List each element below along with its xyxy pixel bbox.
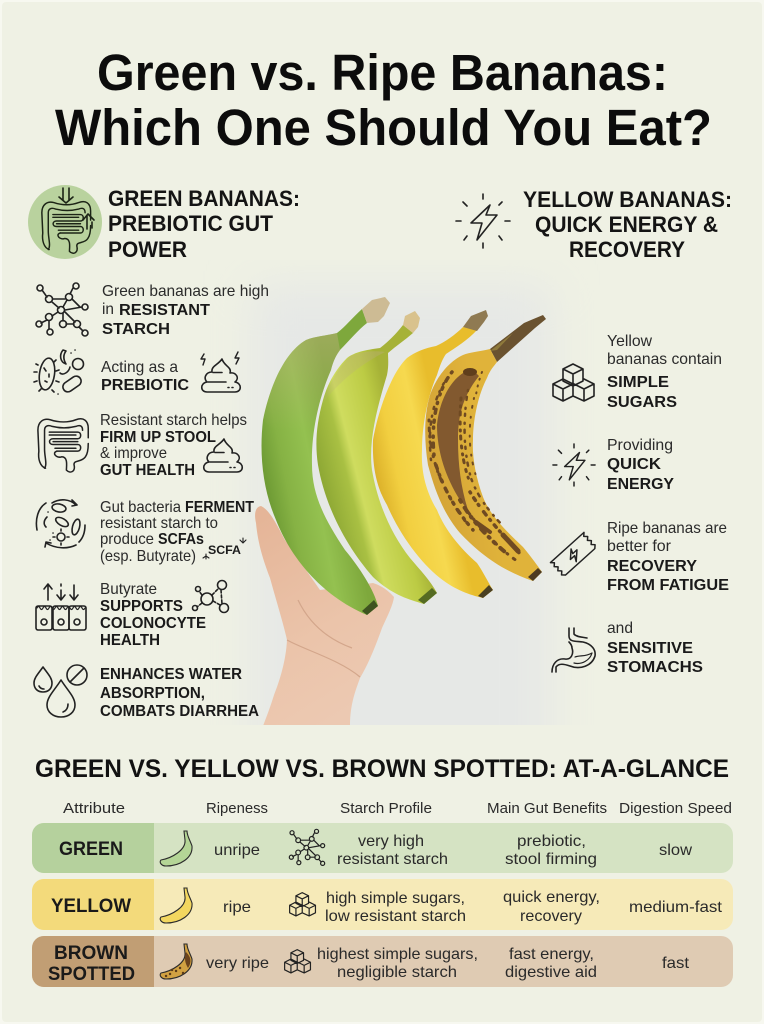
icon: yellow mini banana bbox=[160, 888, 192, 923]
panel: yellow banana benefits bbox=[550, 333, 729, 676]
table row: yellow: ripe bbox=[223, 899, 251, 916]
heading: yellow bananas: RECOVERY bbox=[569, 237, 685, 262]
table header: Main Gut Benefits bbox=[487, 800, 607, 817]
table header: Attribute bbox=[63, 800, 125, 817]
text: quick energy: Providing bbox=[607, 437, 673, 454]
text: quick energy: QUICK bbox=[607, 456, 661, 473]
text: ferment: SCFAs bbox=[158, 531, 204, 548]
icon: starch molecule bbox=[36, 283, 88, 336]
text: sensitive stomachs: SENSITIVE bbox=[607, 640, 693, 657]
text: sensitive stomachs: STOMACHS bbox=[607, 659, 703, 676]
text: resistant starch: in bbox=[102, 301, 114, 318]
text: colonocyte bbox=[100, 581, 206, 649]
icon: water drops bbox=[34, 665, 87, 717]
text: ferment: Gut bacteria bbox=[100, 499, 181, 516]
text: recovery: Ripe bananas are bbox=[607, 520, 727, 537]
icon: bacteria bbox=[34, 350, 84, 394]
panel: green banana benefits bbox=[34, 283, 269, 720]
table row: brown spotted: fast bbox=[662, 955, 690, 972]
icon: gut in green circle bbox=[28, 185, 102, 259]
text: resistant starch: RESISTANT bbox=[119, 302, 210, 319]
photo backdrop bbox=[280, 311, 524, 725]
text: ferment: (esp. Butyrate) bbox=[100, 548, 196, 565]
table row: green: very high bbox=[358, 833, 424, 850]
title: Green vs. Ripe Bananas: bbox=[97, 44, 668, 101]
table row: yellow: recovery bbox=[520, 908, 582, 925]
brown spotted banana bbox=[425, 315, 546, 581]
text: ferment bbox=[100, 499, 254, 565]
text: recovery: RECOVERY bbox=[607, 558, 697, 575]
lime banana bbox=[316, 311, 437, 604]
text: ferment: SCFA bbox=[208, 543, 241, 557]
text: sensitive stomachs: and bbox=[607, 620, 633, 637]
table row: yellow: quick energy, bbox=[503, 889, 600, 906]
icon: green mini banana bbox=[160, 831, 192, 866]
text: prebiotic: Acting as a bbox=[101, 359, 178, 376]
icon: cubes bbox=[285, 950, 310, 973]
icon: brown mini banana bbox=[160, 944, 192, 979]
icon: sugar cubes bbox=[553, 364, 594, 401]
table row: brown spotted: fast energy, bbox=[509, 946, 594, 963]
table row: brown spotted: BROWN bbox=[54, 943, 128, 964]
text: colonocyte: Butyrate bbox=[100, 581, 157, 598]
table header bbox=[63, 800, 732, 817]
table row: yellow: medium-fast bbox=[629, 899, 723, 916]
table row: green bbox=[32, 823, 733, 873]
table header: Starch Profile bbox=[340, 800, 432, 817]
table row: green: GREEN bbox=[59, 839, 123, 860]
text: water absorption: ENHANCES WATER bbox=[100, 666, 242, 683]
text: colonocyte: COLONOCYTE bbox=[100, 615, 206, 632]
title bbox=[55, 44, 712, 156]
text: prebiotic bbox=[101, 359, 189, 394]
heading: green bananas: GREEN BANANAS: bbox=[108, 186, 300, 211]
icon: gut bbox=[38, 419, 88, 472]
section heading: at-a-glance: GREEN VS. YELLOW VS. BROWN SPOTTED: AT-A-GLANCE bbox=[35, 755, 729, 783]
icon: butyrate molecule bbox=[192, 580, 228, 612]
title: Which One Should You Eat? bbox=[55, 99, 712, 156]
heading: green bananas bbox=[108, 186, 300, 262]
yellow banana bbox=[373, 310, 493, 598]
text: simple sugars: SIMPLE bbox=[607, 374, 669, 391]
table row: brown spotted: very ripe bbox=[206, 955, 269, 972]
table row: green: stool firming bbox=[505, 851, 597, 868]
heading: green bananas: POWER bbox=[108, 237, 187, 262]
text: water absorption: ABSORPTION, bbox=[100, 685, 205, 702]
text: firm up stool: FIRM UP STOOL bbox=[100, 429, 216, 446]
table header: Digestion Speed bbox=[619, 800, 732, 817]
icon: stool bbox=[204, 439, 242, 472]
text: resistant starch: STARCH bbox=[102, 321, 170, 338]
table row: green: unripe bbox=[214, 842, 260, 859]
text: water absorption bbox=[100, 666, 259, 720]
text: simple sugars: Yellow bbox=[607, 333, 652, 350]
text: ferment: FERMENT bbox=[185, 499, 254, 516]
hand bbox=[255, 506, 394, 726]
heading: yellow bananas bbox=[523, 187, 732, 262]
text: firm up stool: GUT HEALTH bbox=[100, 462, 195, 479]
icon: quick energy bbox=[553, 444, 595, 486]
text: quick energy bbox=[607, 437, 674, 493]
table header: Ripeness bbox=[206, 800, 268, 817]
table row: yellow: YELLOW bbox=[51, 896, 131, 917]
heading: yellow bananas: QUICK ENERGY & bbox=[535, 212, 718, 237]
text: water absorption: COMBATS DIARRHEA bbox=[100, 703, 259, 720]
text: simple sugars bbox=[607, 333, 722, 411]
text: firm up stool bbox=[100, 412, 247, 479]
table row: green: prebiotic, bbox=[517, 833, 586, 850]
green banana bbox=[262, 297, 390, 615]
icon: lightning heading bbox=[456, 194, 510, 248]
table row: brown spotted: negligible starch bbox=[337, 964, 457, 981]
table row: green: resistant starch bbox=[337, 851, 448, 868]
text: resistant starch bbox=[102, 283, 269, 338]
icon: colon cells bbox=[36, 584, 86, 630]
icon: gut bacteria ring bbox=[36, 500, 85, 548]
heading: yellow bananas: YELLOW BANANAS: bbox=[523, 187, 732, 212]
photo: hand holding four bananas bbox=[255, 297, 546, 726]
text: simple sugars: bananas contain bbox=[607, 351, 722, 368]
text: sensitive stomachs bbox=[607, 620, 703, 676]
text: ferment: produce bbox=[100, 531, 154, 548]
table row: yellow: high simple sugars, bbox=[326, 890, 465, 907]
table row: brown spotted: SPOTTED bbox=[48, 964, 135, 985]
text: firm up stool: Resistant starch helps bbox=[100, 412, 247, 429]
text: recovery: better for bbox=[607, 538, 672, 555]
icon: energy bar bbox=[550, 532, 597, 577]
icon: cubes bbox=[290, 893, 315, 916]
text: resistant starch: Green bananas are high bbox=[102, 283, 269, 300]
text: ferment: resistant starch to bbox=[100, 515, 218, 532]
text: recovery bbox=[607, 520, 729, 594]
table row: brown spotted: digestive aid bbox=[505, 964, 597, 981]
text: recovery: FROM FATIGUE bbox=[607, 577, 729, 594]
text: prebiotic: PREBIOTIC bbox=[101, 377, 189, 394]
text: simple sugars: SUGARS bbox=[607, 394, 677, 411]
text: colonocyte: HEALTH bbox=[100, 632, 160, 649]
text: quick energy: ENERGY bbox=[607, 476, 674, 493]
table row: yellow: low resistant starch bbox=[325, 908, 466, 925]
table row: yellow bbox=[32, 879, 733, 930]
icon: stomach bbox=[552, 628, 595, 672]
icon: stool with bolts bbox=[201, 352, 240, 392]
text: firm up stool: & improve bbox=[100, 445, 167, 462]
icon: molecule bbox=[289, 829, 325, 865]
table row: brown spotted bbox=[32, 936, 733, 987]
icon: scfa sparks bbox=[203, 538, 246, 559]
table row: green: slow bbox=[659, 842, 692, 859]
text: colonocyte: SUPPORTS bbox=[100, 598, 183, 615]
table row: brown spotted: highest simple sugars, bbox=[317, 946, 478, 963]
heading: green bananas: PREBIOTIC GUT bbox=[108, 211, 274, 236]
